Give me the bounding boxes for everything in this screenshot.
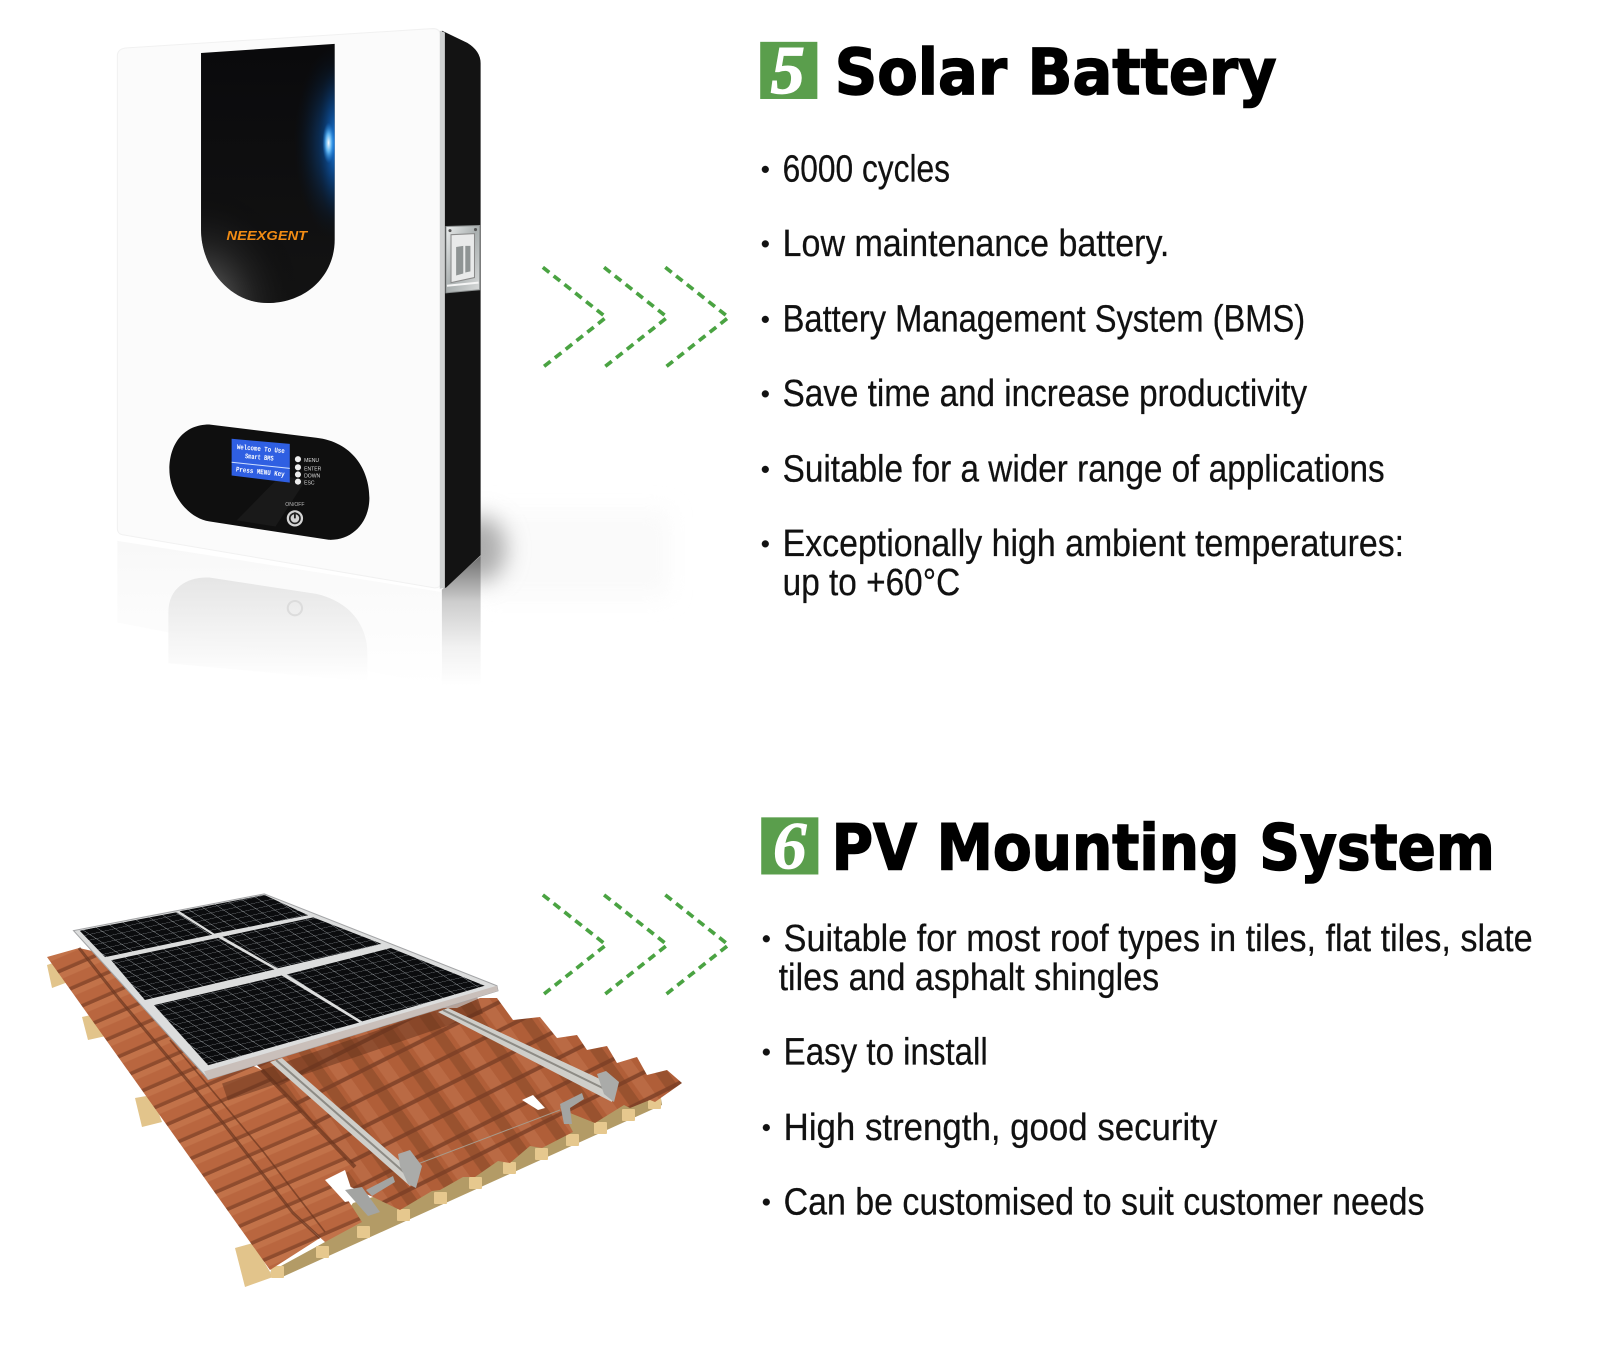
LCD screen: Welcome To Use <box>236 444 285 456</box>
roof structure <box>47 948 682 1287</box>
mounting rail front <box>270 1058 422 1216</box>
mounting rail rear <box>438 1008 619 1124</box>
roof tiles: centre field <box>200 998 682 1210</box>
battery front face <box>117 29 441 588</box>
solar cells <box>80 895 485 1065</box>
LCD screen: Smart BMS <box>245 453 274 464</box>
battery display window <box>201 44 335 303</box>
heading: PV Mounting System: PV Mounting System <box>832 810 1495 884</box>
text block: PV mounting features: Suitable for most roof types in tiles, flat tiles, slate <box>784 917 1533 959</box>
roof tiles: second strip <box>79 948 362 1242</box>
roof hook lower <box>560 1093 584 1124</box>
tile seams <box>79 948 355 1238</box>
product image: solar battery <box>117 28 524 664</box>
reflection of battery <box>117 541 481 686</box>
text block: solar battery features <box>762 148 1404 603</box>
menu buttons <box>295 456 322 487</box>
text block: PV mounting features: Can be customised to suit customer needs <box>784 1180 1424 1222</box>
arrow: dashed chevrons, bottom <box>543 895 729 995</box>
roof hook lower <box>345 1176 395 1216</box>
number badge 5: 5 <box>771 33 805 108</box>
text block: solar battery features: Battery Management System (BMS) <box>783 298 1305 340</box>
panel shadow on tiles <box>225 1005 480 1092</box>
wooden battens <box>47 960 273 1287</box>
panel frame <box>73 894 498 1080</box>
product image: PV mounting system on tiled roof <box>47 894 682 1287</box>
gaps in the tiles <box>325 1095 545 1202</box>
battery side panel <box>442 31 481 588</box>
heading: Solar Battery: Solar Battery <box>835 35 1277 109</box>
number badge 6: 6 <box>773 808 807 883</box>
blue light glow <box>301 62 335 224</box>
control panel <box>169 424 369 540</box>
number badge 6 <box>761 808 818 883</box>
LCD screen: Press MENU Key <box>235 466 286 480</box>
menu buttons: ESC <box>304 481 315 487</box>
text block: solar battery features: Low maintenance battery. <box>783 222 1169 264</box>
tie wire <box>415 1110 560 1165</box>
batten tabs <box>271 1097 661 1278</box>
number badge 5 <box>760 33 817 108</box>
text block: PV mounting features: tiles and asphalt shingles <box>779 956 1159 998</box>
menu buttons: DOWN <box>304 474 321 480</box>
text block: solar battery features: Exceptionally high ambient temperatures: <box>783 522 1404 564</box>
power button <box>285 502 305 527</box>
metal edge strip <box>440 31 445 589</box>
floor shadow <box>453 510 669 597</box>
eave board <box>270 1092 662 1278</box>
logo: NEEXGENT <box>227 228 309 243</box>
text block: solar battery features: Suitable for a wider range of applications <box>783 448 1385 490</box>
LCD screen <box>232 439 290 483</box>
roof tiles: outer strip <box>47 948 320 1270</box>
menu buttons: ENTER <box>304 466 322 472</box>
text block: PV mounting features <box>763 917 1533 1222</box>
rail clamp <box>398 1150 422 1188</box>
solar panel array <box>73 894 498 1080</box>
metal handle <box>446 226 480 293</box>
power button: ON/OFF <box>285 502 305 508</box>
text block: solar battery features: 6000 cycles <box>783 148 950 190</box>
arrow: dashed chevrons, top <box>543 267 729 367</box>
rail clamp <box>597 1071 619 1102</box>
text block: PV mounting features: Easy to install <box>784 1030 988 1072</box>
text block: solar battery features: Save time and increase productivity <box>783 372 1307 414</box>
menu buttons: MENU <box>304 458 319 464</box>
text block: PV mounting features: High strength, good security <box>784 1106 1217 1148</box>
text block: solar battery features: up to +60°C <box>783 561 960 603</box>
